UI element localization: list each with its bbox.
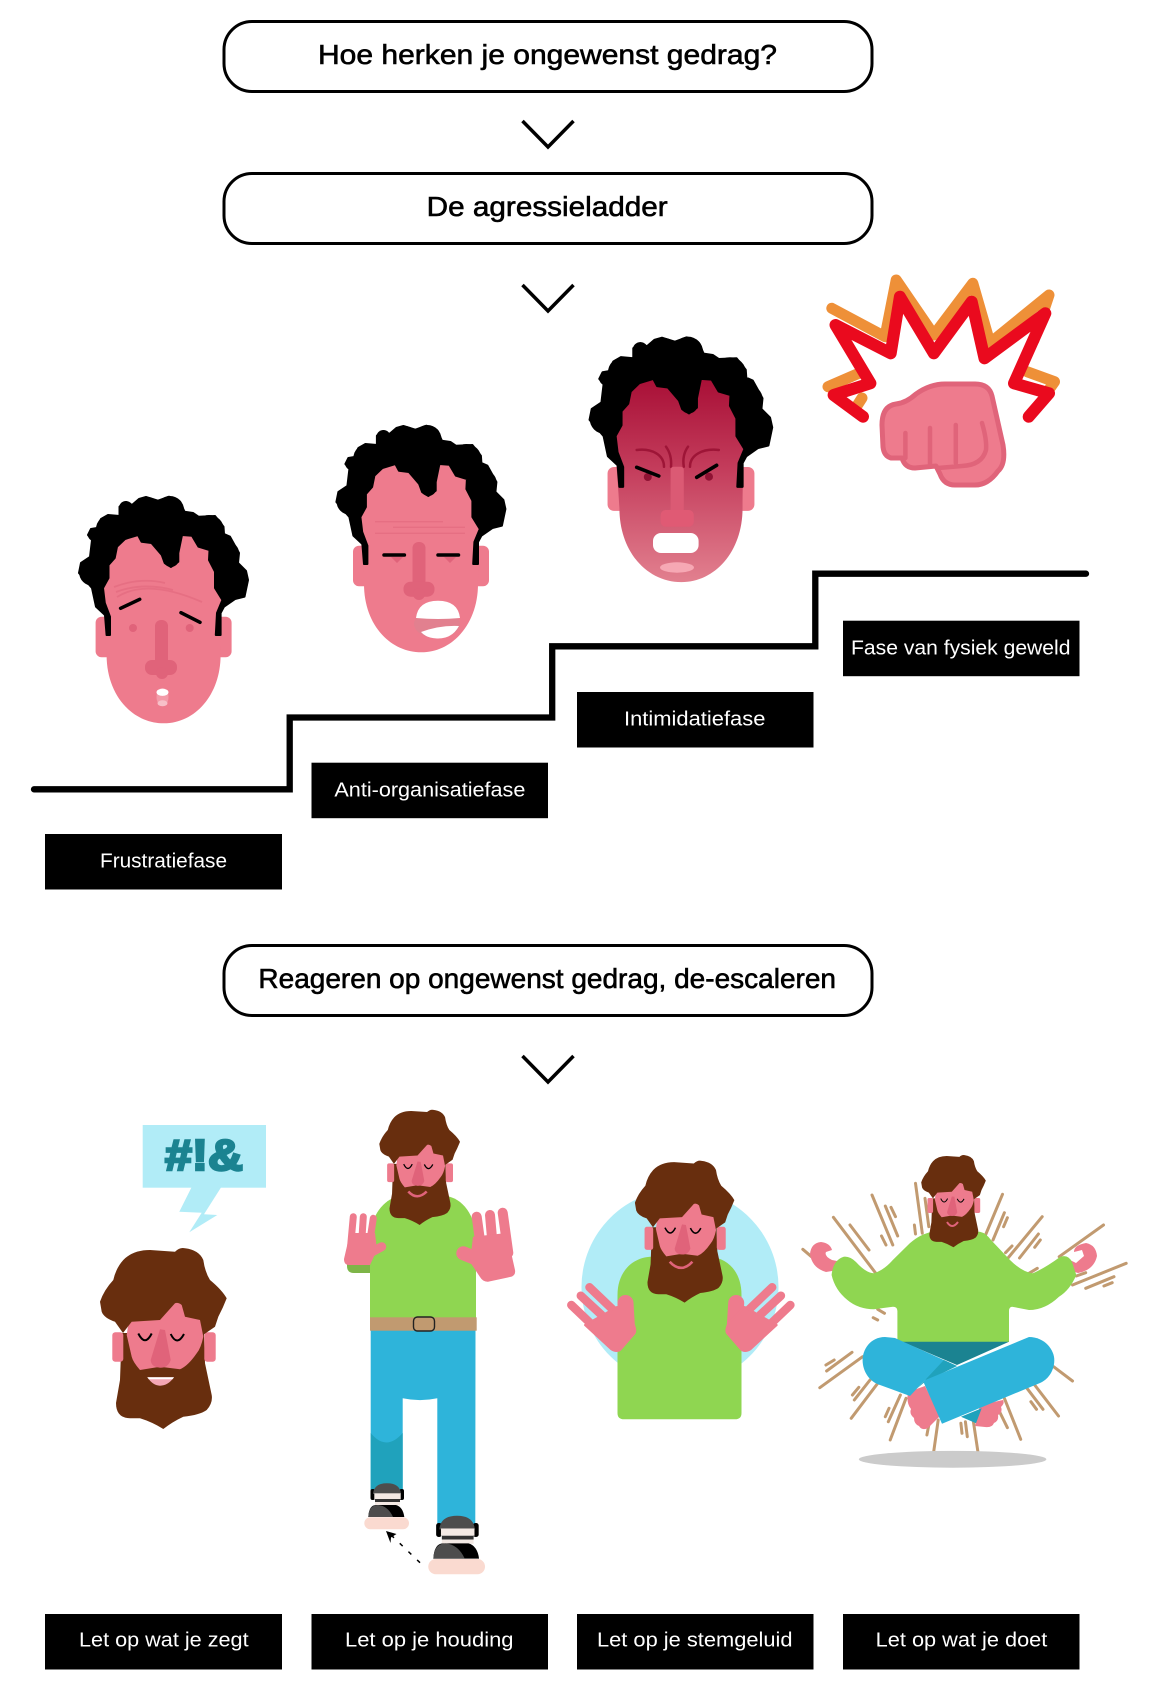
ground shadow [859,1451,1046,1468]
label: Let op wat je zegt: Let op wat je zegt [79,1630,249,1652]
speech bubble with #!& [143,1125,266,1232]
arrow: chevron down 3 [522,1056,574,1082]
heading: De agressieladder [224,174,872,244]
label: Let op wat je doet [843,1614,1080,1670]
heading: De agressieladder: De agressieladder [427,191,668,222]
heading: Hoe herken je ongewenst gedrag?: Hoe herken je ongewenst gedrag? [318,39,777,70]
label: Let op wat je zegt [45,1614,282,1670]
label: Intimidatiefase [577,692,814,748]
icon: left open hand [571,1287,635,1351]
face: intimidation [590,337,772,582]
label: Intimidatiefase: Intimidatiefase [624,709,765,731]
face: frustrated [79,496,248,723]
heading: Hoe herken je ongewenst gedrag? [224,22,872,92]
label: Frustratiefase: Frustratiefase [100,851,227,873]
icon: right hand [463,1213,515,1282]
icon: fist with impact burst [828,280,1054,485]
crossed legs [863,1337,1054,1424]
feet [907,1386,1004,1429]
label: Let op je stemgeluid [577,1614,814,1670]
person: head speaking [100,1248,227,1429]
person: standing with stop hands [344,1110,515,1574]
label: Let op je stemgeluid: Let op je stemgeluid [597,1630,792,1652]
arrow: chevron down 1 [522,121,574,147]
rays [803,1183,1126,1452]
speech bubble with #!&: #!& [165,1131,243,1180]
label: Fase van fysiek geweld [843,621,1080,676]
label: Let op je houding [312,1614,548,1670]
label: Fase van fysiek geweld: Fase van fysiek geweld [851,637,1070,659]
heading: Reageren op ongewenst gedrag, de-escaleren: Reageren op ongewenst gedrag, de-escaleren [258,963,836,994]
hands in mudra [810,1242,1097,1273]
label: Frustratiefase [45,834,282,890]
head [921,1155,986,1247]
face: anti-organisation [336,425,505,652]
arrow: chevron down 2 [522,285,574,311]
sweater [832,1232,1076,1342]
icon: left hand [344,1217,382,1265]
person: voice with blue circle [571,1161,790,1419]
person: meditating with rays [803,1155,1126,1468]
heading: Reageren op ongewenst gedrag, de-escaleren [224,946,872,1016]
label: Anti-organisatiefase [312,763,548,818]
staircase line [34,574,1086,789]
icon: right open hand [726,1287,790,1351]
label: Anti-organisatiefase: Anti-organisatiefase [334,779,525,801]
label: Let op je houding: Let op je houding [345,1630,514,1652]
arrow: dashed step back [386,1531,420,1563]
label: Let op wat je doet: Let op wat je doet [876,1630,1048,1652]
